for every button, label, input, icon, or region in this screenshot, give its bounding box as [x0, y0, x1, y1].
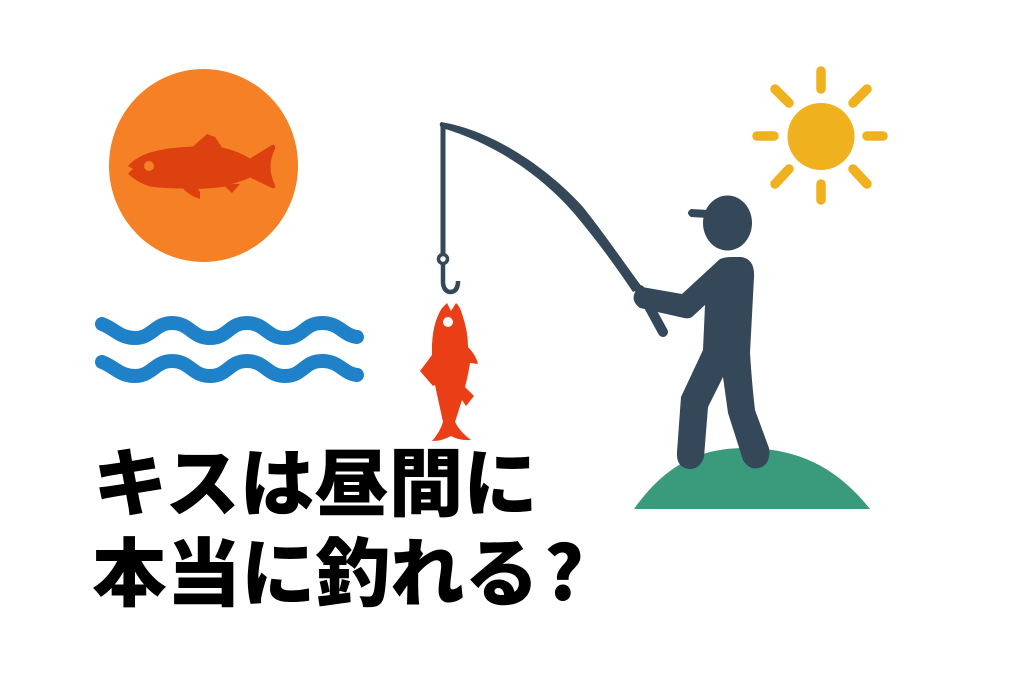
title: 本当に釣れる?: [92, 515, 584, 622]
icon: fishing rod with line and hook: [438, 122, 663, 332]
icon: hanging red fish: [420, 303, 478, 441]
icon: sun: [757, 71, 883, 200]
icon: green hill: [634, 448, 870, 509]
title: キスは昼間に: [93, 443, 538, 526]
icon: orange circle with fish: [109, 69, 298, 262]
title: [92, 443, 584, 622]
icon: angler figure: [634, 196, 769, 469]
icon: water waves: [102, 323, 357, 376]
